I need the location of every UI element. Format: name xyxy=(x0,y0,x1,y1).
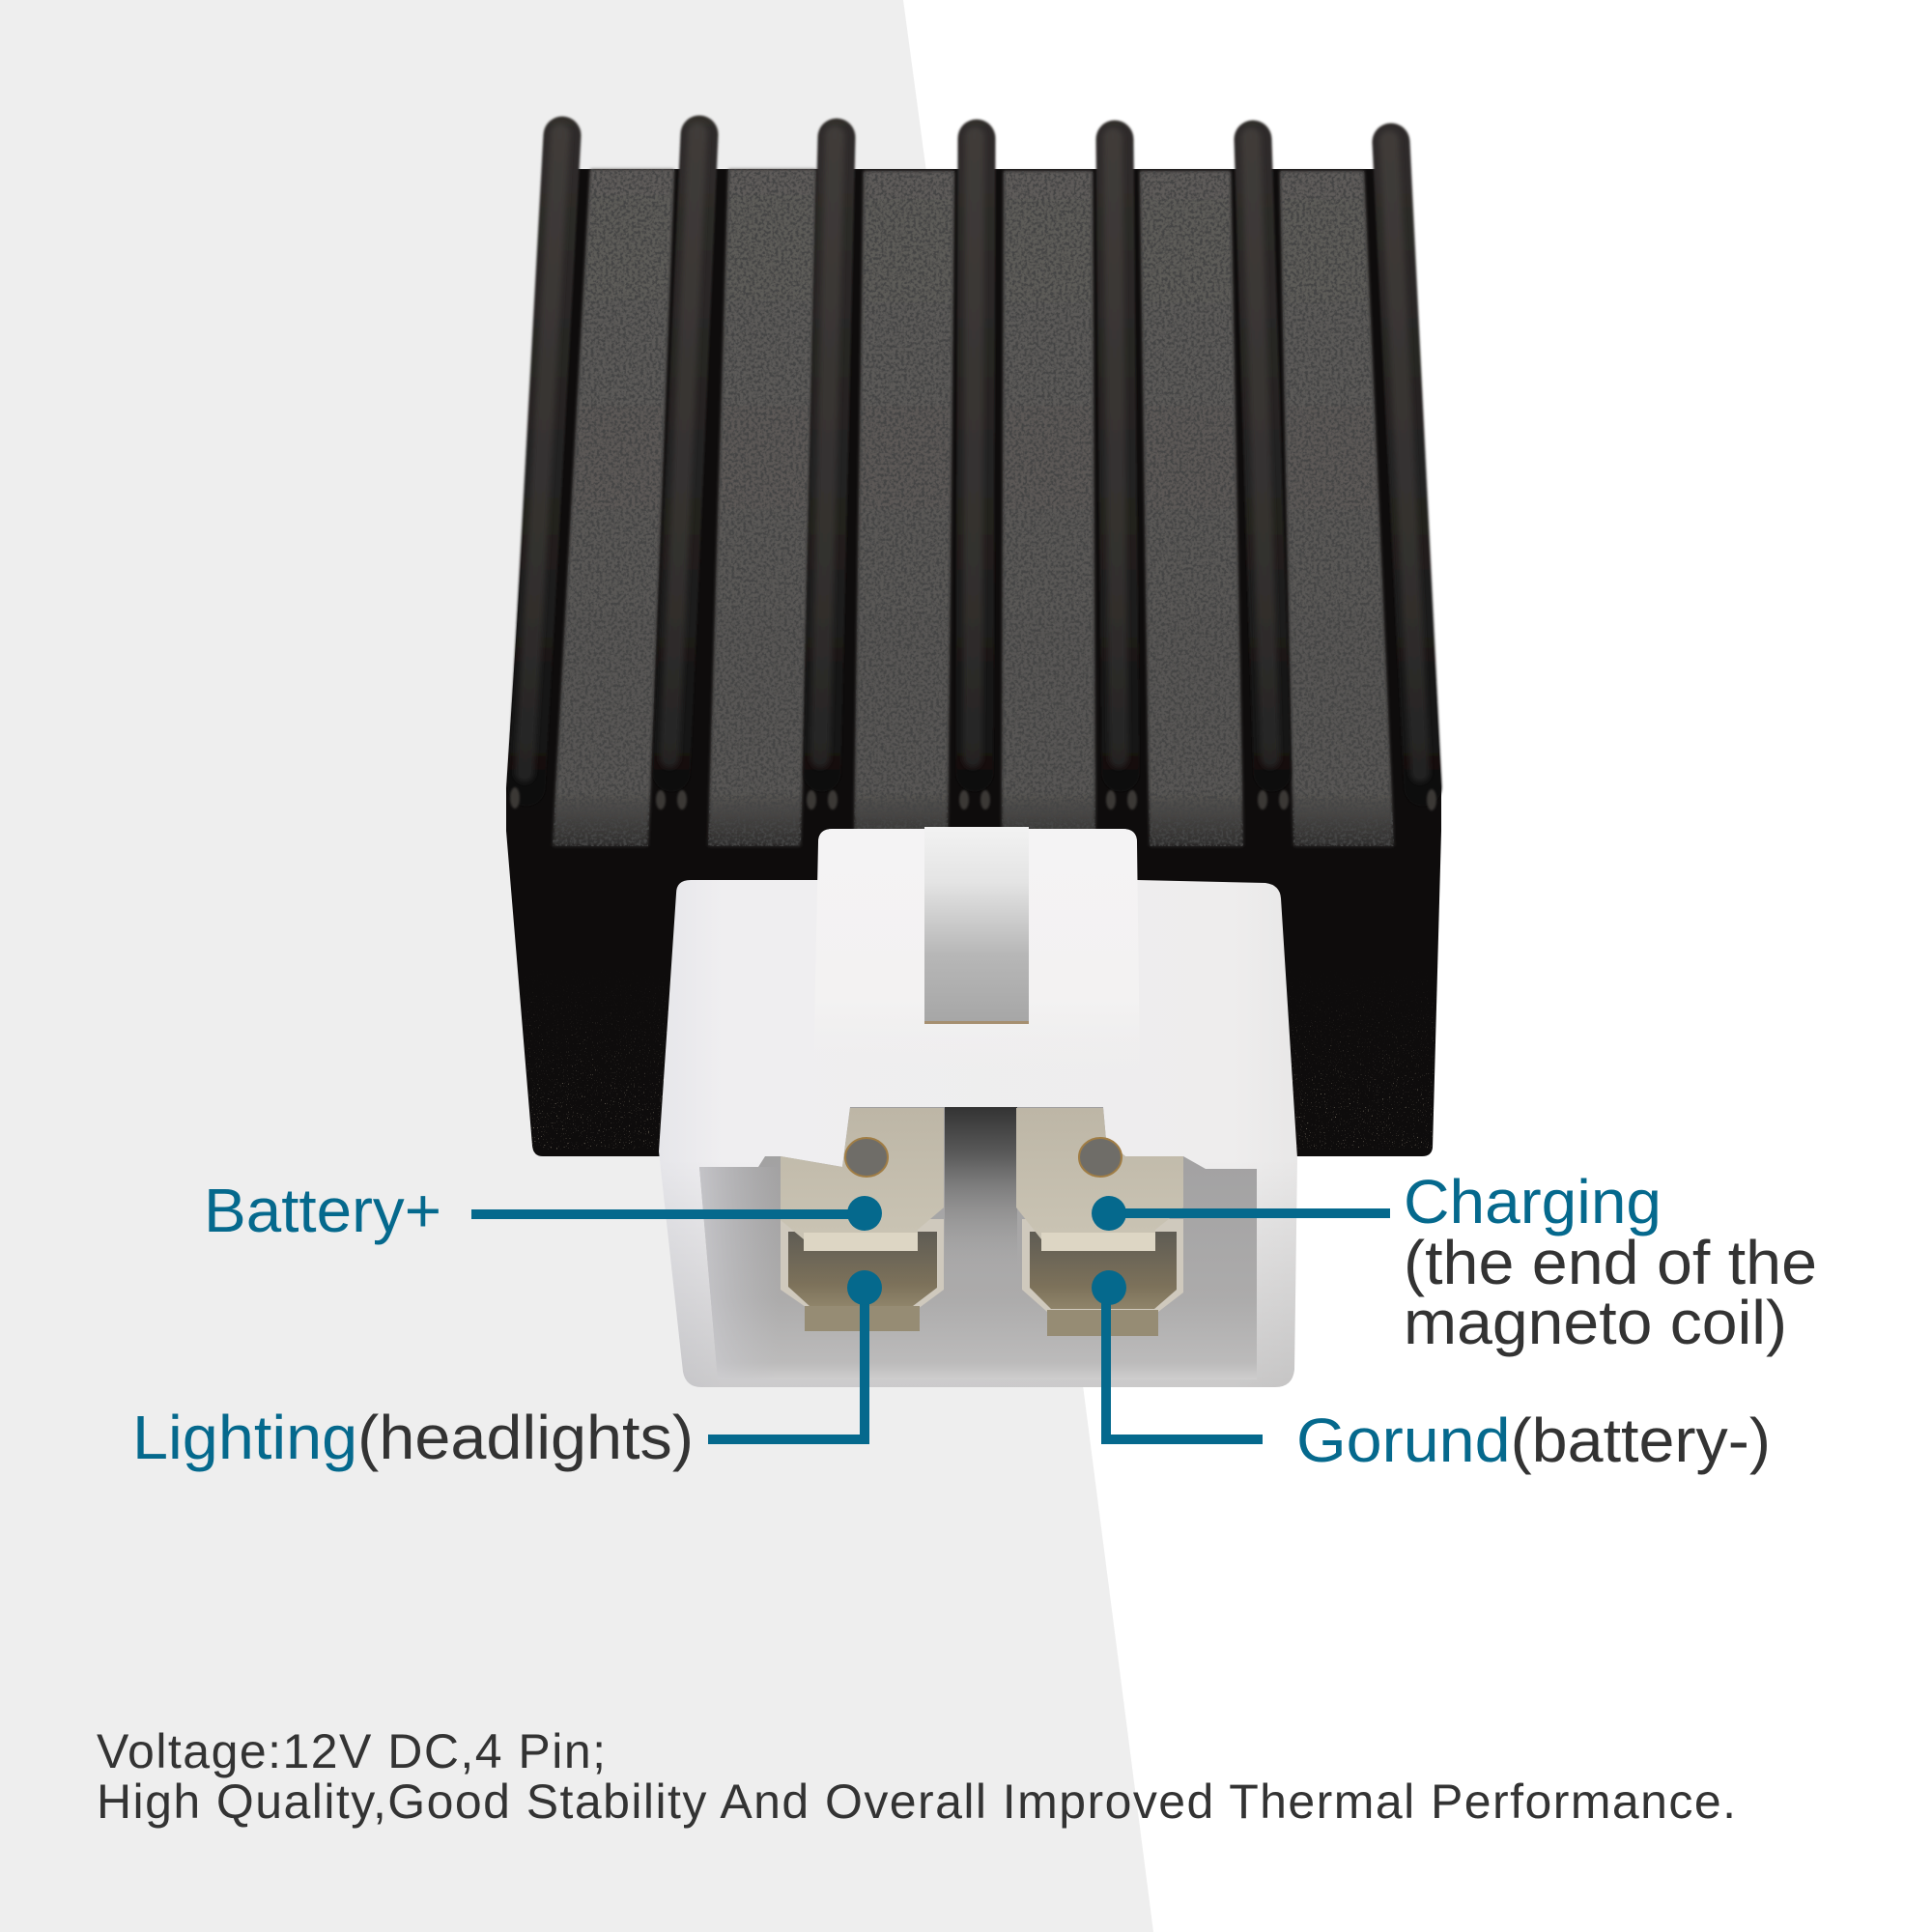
lower shell shading xyxy=(659,1151,1297,1387)
pin dot xyxy=(847,1270,882,1305)
fin base knobs xyxy=(510,787,1436,810)
leader line xyxy=(1109,1208,1390,1218)
leader line xyxy=(708,1288,865,1439)
right terminal bright tab xyxy=(1041,1233,1155,1251)
right terminal lower tab xyxy=(1047,1310,1158,1336)
callout: Charging xyxy=(1092,1167,1817,1357)
centre gap shadow xyxy=(945,1107,1017,1271)
cavity left wall xyxy=(699,1167,779,1379)
pin dot xyxy=(847,1196,882,1231)
label: Lighting(headlights) xyxy=(132,1403,694,1472)
speckled lower housing xyxy=(522,966,1437,1150)
right metal terminal xyxy=(1016,1108,1183,1336)
left terminal lower tab xyxy=(805,1306,920,1331)
specification text xyxy=(97,1724,1736,1829)
right terminal upper plate xyxy=(1016,1108,1183,1251)
specification text: High Quality,Good Stability And Overall Improved Thermal Performance. xyxy=(97,1775,1736,1829)
label detail xyxy=(1404,1228,1817,1357)
label: Battery+ xyxy=(204,1176,441,1245)
leader line xyxy=(471,1209,865,1219)
black metal housing xyxy=(506,169,1441,1156)
connector shell xyxy=(659,829,1297,1387)
label: Gorund(battery-) xyxy=(1296,1406,1771,1475)
right terminal hole xyxy=(1079,1138,1122,1177)
white plastic connector xyxy=(659,827,1297,1387)
left metal terminal xyxy=(781,1108,944,1331)
grey angled background panel xyxy=(0,0,1153,1932)
label detail: (the end of the xyxy=(1404,1228,1817,1297)
label heading: Charging xyxy=(1404,1167,1662,1236)
left terminal hole xyxy=(845,1138,888,1177)
left terminal bright tab xyxy=(804,1233,918,1251)
raised latch block xyxy=(813,829,1140,1072)
left terminal upper plate xyxy=(781,1108,944,1251)
leader line xyxy=(1106,1288,1263,1439)
terminal cavity xyxy=(699,1107,1257,1379)
pin dot xyxy=(1092,1196,1126,1231)
left terminal lower blade xyxy=(781,1219,944,1331)
right terminal lower blade xyxy=(1022,1219,1183,1336)
pin dot xyxy=(1092,1270,1126,1305)
callout: Battery+ xyxy=(204,1176,882,1245)
seven cooling fins xyxy=(525,132,1423,787)
callout: Lighting xyxy=(132,1270,882,1472)
specification text: Voltage:12V DC,4 Pin; xyxy=(97,1724,606,1778)
product: heat sink body xyxy=(506,132,1441,1156)
callout: Ground xyxy=(1092,1270,1771,1475)
label detail: magneto coil) xyxy=(1404,1288,1787,1357)
latch window xyxy=(924,827,1029,1024)
textured grey plates between fins xyxy=(553,169,1394,846)
